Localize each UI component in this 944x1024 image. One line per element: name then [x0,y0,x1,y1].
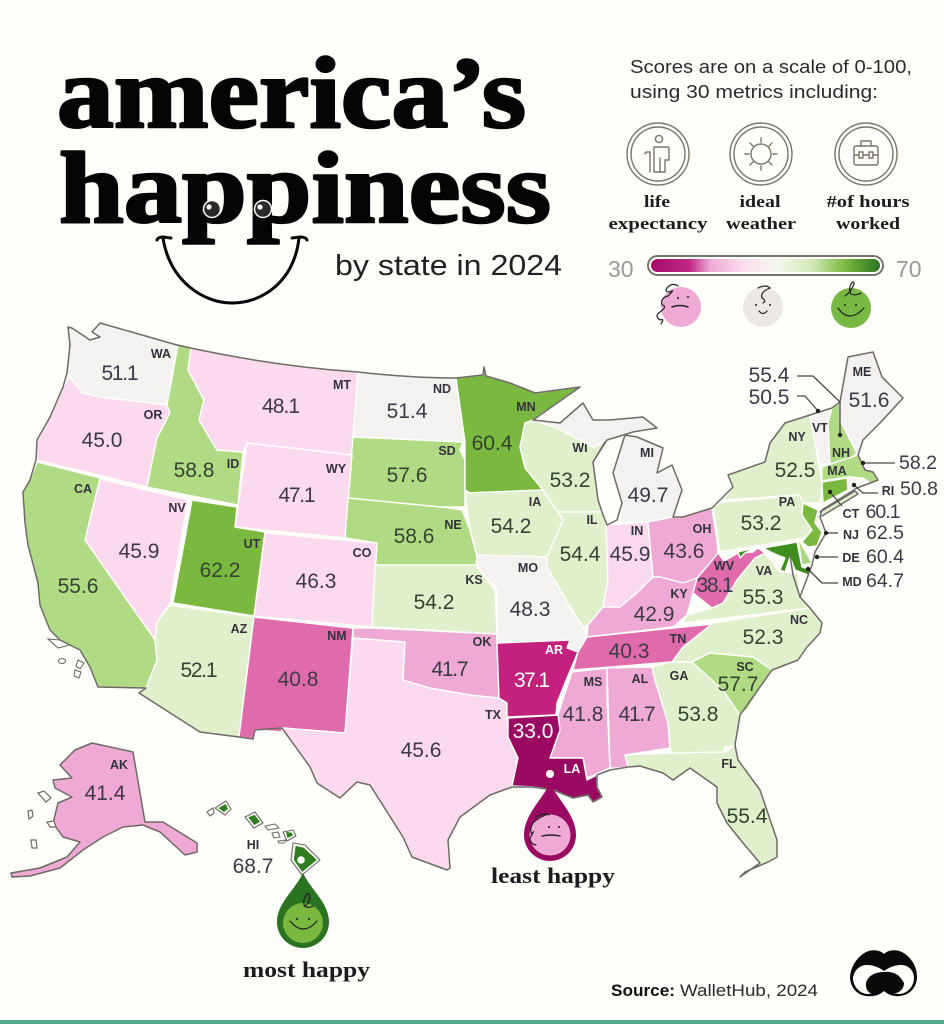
state: TX: 45.6 [401,739,441,762]
state: NH: NH [832,446,850,460]
state: HI: HI [247,838,259,852]
state: GA: GA [670,669,688,683]
state: TN [573,624,712,670]
state: NM: 40.8 [278,668,318,691]
marker: least happy [491,770,615,888]
state: OH: OH [693,522,711,536]
state: AZ [139,605,254,737]
state: WA: 51.1 [102,362,138,385]
state: CA: 55.6 [58,575,98,598]
metric: hours worked [826,123,910,233]
title: america’s [57,37,526,150]
marker: most happy: most happy [243,957,370,982]
callout: MD [806,567,904,592]
state: TX [282,638,518,870]
coastline and border outline [23,323,903,877]
state: NE [345,498,479,566]
state: MA [822,455,878,483]
state: OR: OR [144,408,162,422]
state: OR [36,377,170,487]
state: AZ: AZ [231,622,248,636]
state: NC [672,608,822,670]
state: OK: OK [473,635,491,649]
callout: MA: 58.2 [899,452,937,474]
scale description: Scores are on a scale of 0-100, [630,57,912,77]
state: MT: 48.1 [262,395,300,418]
state: LA: 33.0 [513,720,553,743]
state: ME: 51.6 [849,389,889,412]
metric: life expectancy: life [644,192,671,211]
state: CA: CA [74,482,92,496]
state: MI: MI [640,446,654,460]
metric: ideal weather: ideal [740,192,781,211]
metric: life expectancy: expectancy [608,214,708,233]
state: IN [603,522,653,607]
state: AL: 41.7 [618,703,656,726]
source [611,981,818,1000]
marker: least happy: least happy [491,863,615,888]
callout: NJ [824,522,904,544]
map of US states [11,323,938,878]
metric: hours worked: worked [836,214,901,233]
state: WV: WV [714,559,735,573]
state: AZ: 52.1 [180,659,218,682]
state: GA [652,662,740,753]
state: OR: 45.0 [82,429,122,452]
state: IA [465,490,563,557]
state: TN: 40.3 [609,640,649,663]
callout: CT: CT [843,507,860,521]
metric: ideal weather [726,123,797,233]
state: WY: WY [326,462,347,476]
state: VT [810,408,832,465]
state: ME: ME [853,365,871,379]
state: RI [848,477,857,490]
state: IL: 54.4 [560,543,601,566]
icon: person [627,123,689,185]
state: ID: ID [227,457,239,471]
state: ID: 58.8 [174,459,214,482]
state: WV [693,548,765,608]
state: NV [85,479,188,640]
callout: RI: RI [882,484,894,498]
state: KS: 54.2 [414,591,454,614]
subtitle: by state in 2024 [335,250,562,282]
state: NV: 45.9 [119,540,159,563]
callout: MD: MD [842,575,862,589]
state: WV: 38.1 [696,574,734,597]
state: LA [508,715,602,802]
state: MA: MA [827,464,847,478]
state: WI [520,420,605,512]
state: DE [798,538,812,565]
state: GA: 53.8 [678,703,718,726]
state: OK [353,628,499,698]
callout: CT: 60.1 [866,501,900,523]
state: ID [147,345,243,505]
metric: ideal weather: weather [726,214,797,233]
callout: NJ: NJ [843,528,859,542]
scale description [630,57,912,102]
state: UT: UT [244,537,261,551]
state: AL: AL [632,672,649,686]
state: OH: 43.6 [664,540,704,563]
Alaska islands [28,791,56,848]
state: SD: SD [438,444,456,458]
callout: DE [815,546,904,568]
state: SC [692,653,772,715]
state: KY: KY [670,587,688,601]
legend: colour scale: 30 [608,256,634,282]
state: SD: 57.6 [387,464,427,487]
state: AK: AK [110,758,128,772]
state: KY: 42.9 [634,603,674,626]
callout: VT and NH: 50.5 [749,386,789,409]
state: MS [550,668,610,778]
callout: RI: 50.8 [900,478,938,500]
legend: happy face [831,282,871,328]
state: KY [587,577,697,637]
state: SC: 57.7 [718,673,758,696]
state: NV: NV [168,501,186,515]
state: CA [23,462,157,688]
state: NE: NE [444,518,462,532]
state: MN [456,367,580,493]
California islands [48,639,84,678]
state: PA: PA [779,495,795,509]
state: IL: IL [586,513,598,527]
state: VA: VA [756,564,772,578]
state: MO: 48.3 [510,598,550,621]
state: MO [476,555,588,652]
state: NC: NC [790,613,808,627]
state: WA [67,323,177,405]
state: IN: IN [631,524,643,538]
state: OH [648,508,718,583]
state: TN: TN [670,632,686,646]
callout: MA [861,452,937,474]
state: KS: KS [465,573,483,587]
state: PA: 53.2 [741,512,781,535]
state: LA: LA [564,762,580,776]
metric: life expectancy [608,123,708,233]
state: WA: WA [151,347,171,361]
callout: VT and NH [749,364,842,437]
state: AR: AR [545,643,563,657]
state: NH [828,403,857,464]
icon: briefcase [835,123,897,185]
callout: DE: 60.4 [866,546,904,568]
title [57,37,551,245]
callout: CT [828,490,900,523]
state: IA: 54.2 [491,515,531,538]
state: CO [254,533,377,627]
state: NC: 52.3 [743,626,783,649]
state: MS: MS [584,675,602,689]
metric: hours worked: #of hours [826,192,910,211]
legend: colour scale [608,256,922,282]
state: CO: CO [353,546,372,560]
source: Source: [611,981,675,1000]
state: ND [353,372,465,442]
state: MS: 41.8 [563,703,603,726]
state: CO: 46.3 [296,570,336,593]
callout: RI [852,478,938,500]
state: AK [11,743,197,877]
state: MI [533,403,682,522]
state: MI: 49.7 [628,484,668,507]
legend: colour scale: 70 [896,256,922,282]
state: SD [348,437,465,507]
state: AL [607,667,670,768]
state: MN: 60.4 [472,432,513,455]
state: MT: MT [333,378,351,392]
state: NY: 52.5 [775,459,815,482]
state: VT: VT [812,421,828,435]
state: ND: ND [433,382,451,396]
state: NJ [802,503,822,547]
state: ME [840,352,903,455]
state: WY: 47.1 [278,484,316,507]
state: NM [239,617,353,739]
state: IA: IA [529,495,541,509]
state: MO: MO [518,561,538,575]
state: MN: MN [516,400,536,414]
scale description: using 30 metrics including: [630,82,878,102]
state: HI [207,801,320,878]
title smile face [157,200,307,303]
legend: neutral face [743,286,783,327]
state: OK: 41.7 [432,658,468,681]
logo [850,950,917,996]
state: KS [372,565,497,634]
state: MD [738,542,812,575]
state: SC: SC [736,660,754,674]
legend: sad face [657,284,701,327]
state: AR [497,640,578,717]
bottom bar [0,1020,944,1024]
state: ND: 51.4 [387,400,428,423]
state: FL: 55.4 [727,805,768,828]
marker: most happy [243,856,370,982]
state: NY [723,415,858,516]
state: NM: NM [327,629,347,643]
callout: NJ: 62.5 [866,522,904,544]
state: WI: 53.2 [550,469,590,492]
source: WalletHub, 2024 [680,981,818,1000]
callout: VT and NH: 55.4 [749,364,790,387]
state: HI: 68.7 [233,855,273,878]
state: AK: 41.4 [85,782,126,805]
icon: sun [730,123,792,185]
state: VA [683,553,810,623]
state: IN: 45.9 [610,543,650,566]
state: FL: FL [721,757,737,771]
state: NE: 58.6 [394,525,434,548]
state: VA: 55.3 [743,586,783,609]
state: WI: WI [572,441,588,455]
callout: MD: 64.7 [866,570,904,592]
state: UT [173,500,265,616]
state: NY: NY [788,430,806,444]
state: IL [547,512,608,627]
title: happiness [59,132,551,245]
state: MT [188,347,358,455]
state: CT [822,478,848,503]
state: TX: TX [485,708,502,722]
state: FL [625,745,777,877]
state: AR: 37.1 [514,669,550,692]
state: WY [235,443,352,538]
state: PA [713,495,820,552]
callout: DE: DE [842,551,860,565]
state: UT: 62.2 [200,559,240,582]
